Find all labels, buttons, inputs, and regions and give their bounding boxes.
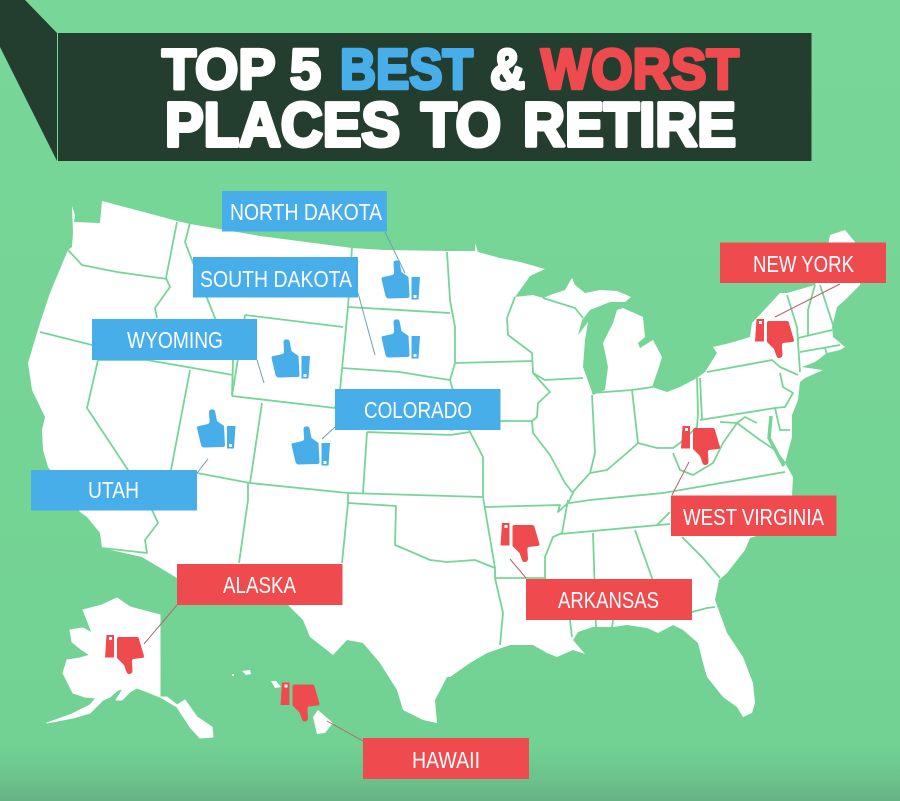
label: New York [720, 242, 886, 283]
title: WORST [541, 38, 739, 102]
title: TO [421, 91, 501, 160]
state borders [40, 222, 840, 645]
label: Alaska [177, 564, 342, 605]
title: TOP 5 [162, 38, 321, 102]
thumb up: South Dakota [382, 319, 420, 358]
label: Colorado [335, 389, 500, 430]
label: Wyoming: WYOMING [127, 327, 223, 353]
label: West Virginia [671, 496, 836, 536]
label: South Dakota [193, 257, 358, 298]
thumb up: Colorado [292, 426, 330, 466]
label: West Virginia: WEST VIRGINIA [683, 504, 825, 530]
thumb down: West Virginia [681, 426, 720, 465]
title [162, 38, 739, 160]
label: New York: NEW YORK [753, 251, 855, 277]
thumb up: North Dakota [382, 260, 420, 300]
title banner [58, 33, 812, 161]
title banner fold [0, 0, 57, 161]
label: South Dakota: SOUTH DAKOTA [200, 266, 353, 292]
thumb down: Alaska [105, 635, 144, 674]
title: PLACES [165, 91, 400, 160]
label: Wyoming [92, 319, 257, 360]
title: RETIRE [523, 91, 736, 160]
label: North Dakota [222, 191, 387, 232]
long island sound [802, 362, 823, 370]
map: contiguous United States [28, 201, 862, 723]
label: Alaska: ALASKA [223, 572, 297, 598]
map: Hawaii [232, 670, 333, 734]
title: & [490, 38, 525, 102]
thumb up: Wyoming [272, 339, 310, 378]
thumb down: Arkansas [500, 523, 540, 562]
label: Hawaii [363, 738, 529, 779]
thumb down: Hawaii [280, 682, 320, 722]
label: Utah [31, 470, 197, 510]
label: North Dakota: NORTH DAKOTA [230, 199, 383, 225]
thumb down: New York [755, 319, 794, 358]
thumb up: Utah [197, 409, 236, 448]
label: Colorado: COLORADO [364, 397, 472, 423]
Chesapeake bay [769, 416, 784, 466]
label: Hawaii: HAWAII [412, 747, 480, 773]
label: Arkansas: ARKANSAS [558, 587, 659, 613]
leader lines [144, 232, 840, 741]
label: Utah: UTAH [88, 477, 139, 503]
map: Alaska [47, 598, 213, 738]
title: BEST [340, 38, 473, 102]
label: Arkansas [526, 579, 692, 620]
